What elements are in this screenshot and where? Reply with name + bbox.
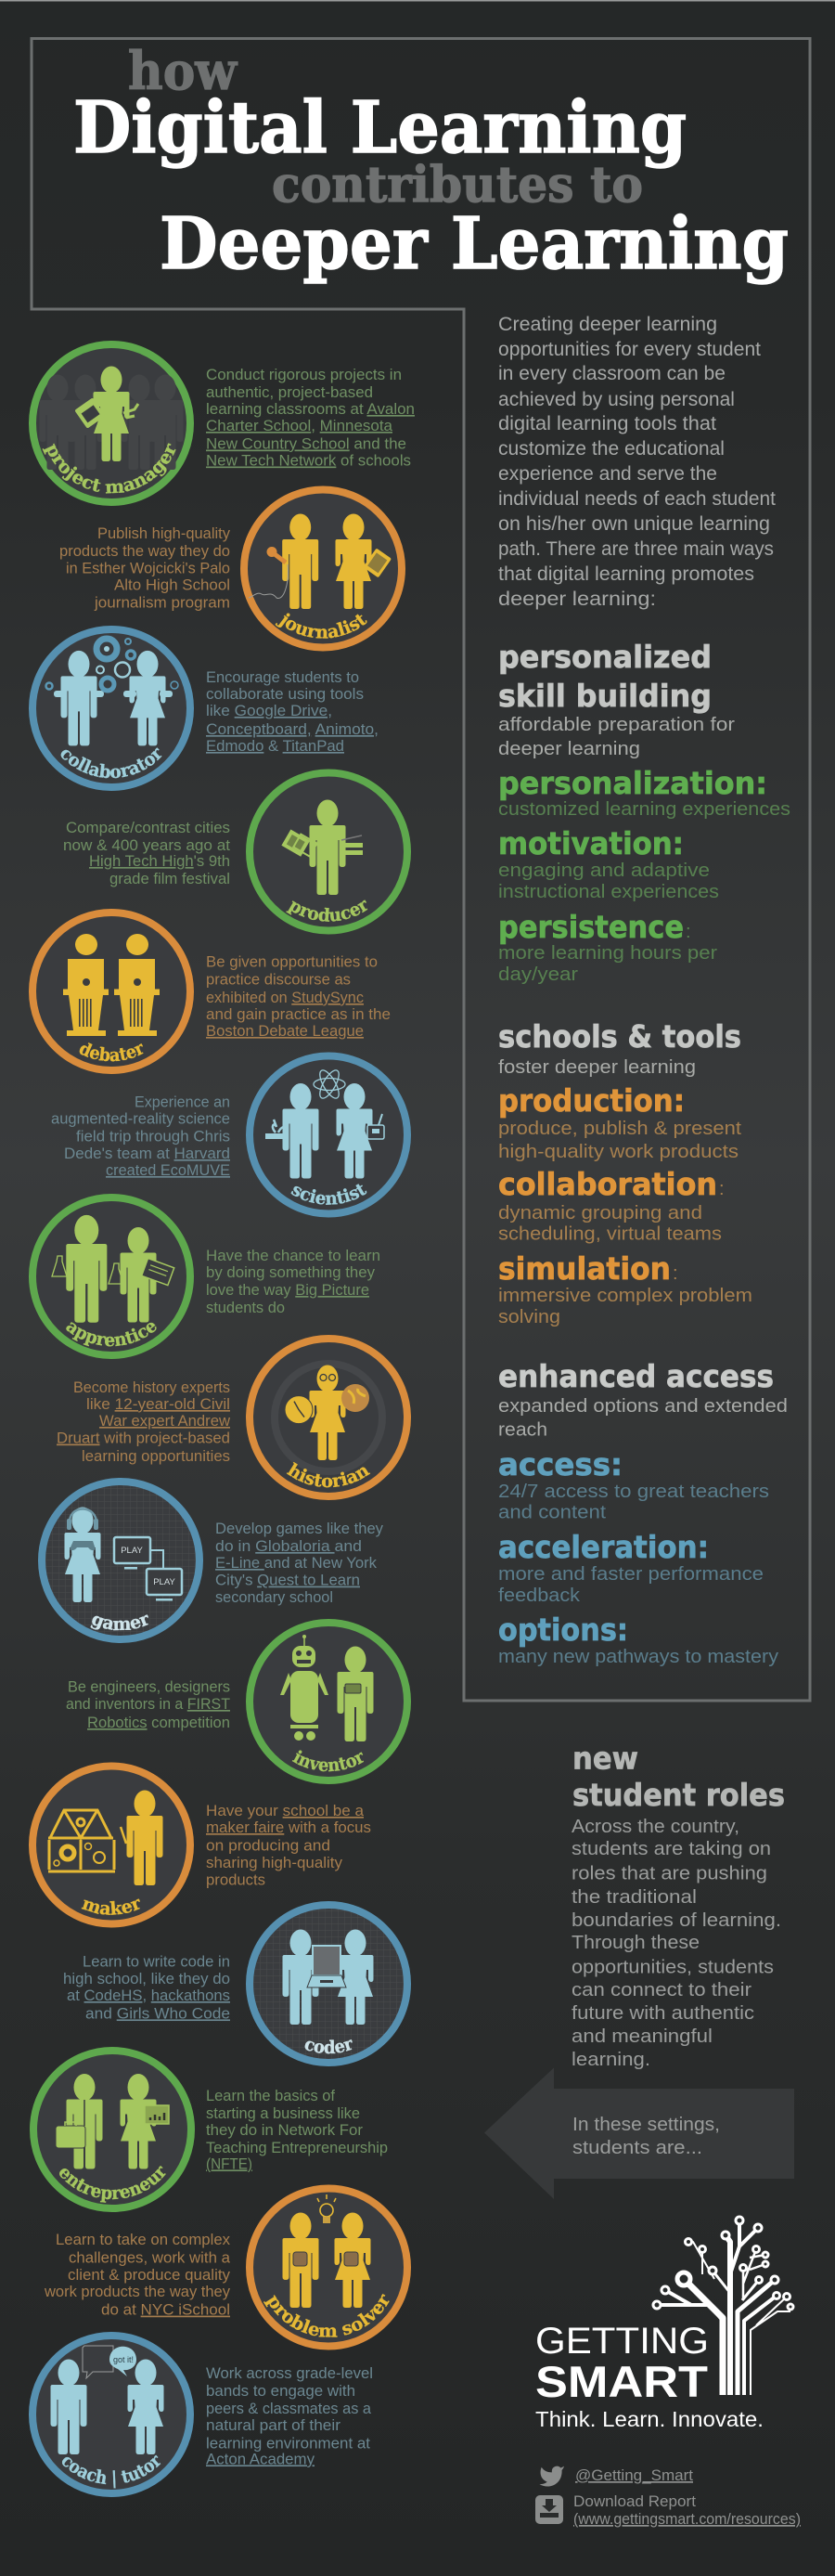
badge: inventor: inventor bbox=[291, 1750, 364, 1771]
text: historian bbox=[57, 1379, 230, 1465]
section: enhanced access: more and faster performance bbox=[498, 1564, 764, 1585]
text: coach tutor bbox=[206, 2365, 373, 2467]
text: historian: War expert Andrew bbox=[99, 1413, 230, 1430]
badge: problem solver: problem solver bbox=[263, 2294, 390, 2337]
logo: getting smart bbox=[535, 2217, 793, 2431]
new student roles text: Across the country, bbox=[572, 1817, 739, 1837]
title: Deeper Learning bbox=[160, 202, 789, 286]
text: historian: like 12-year-old Civil bbox=[86, 1396, 230, 1413]
badge: debater bbox=[29, 909, 194, 1074]
text: entrepreneur: (NFTE) bbox=[206, 2155, 252, 2172]
badge: gamer: PLAY bbox=[121, 1546, 143, 1556]
title: Digital Learning bbox=[73, 86, 687, 170]
text: problem solver bbox=[44, 2232, 231, 2319]
intro paragraph: deeper learning: bbox=[498, 589, 656, 610]
section: enhanced access: options: bbox=[498, 1612, 628, 1648]
intro paragraph: path. There are three main ways bbox=[498, 538, 774, 560]
text: apprentice: students do bbox=[206, 1300, 285, 1316]
badge: coach tutor bbox=[29, 2332, 194, 2497]
intro paragraph: in every classroom can be bbox=[498, 363, 726, 384]
text: collaborator: Conceptboard, Animoto, bbox=[206, 721, 379, 738]
text: maker: products bbox=[206, 1872, 265, 1889]
section: personalized skill building: engaging and adaptive bbox=[498, 861, 710, 881]
section: schools and tools: simulation bbox=[498, 1250, 671, 1287]
text: coder: high school, like they do bbox=[63, 1971, 230, 1987]
badge: coach tutor: coach | tutor bbox=[61, 2454, 161, 2488]
text: scientist: created EcoMUVE bbox=[106, 1162, 230, 1179]
title: contributes to bbox=[272, 156, 643, 214]
section: personalized skill building: personalized bbox=[498, 639, 712, 675]
badge: producer bbox=[246, 769, 411, 934]
text: producer: now & 400 years ago at bbox=[63, 837, 230, 854]
badge: scientist: scientist bbox=[291, 1184, 367, 1205]
badge: coder bbox=[246, 1901, 411, 2066]
section: schools and tools: foster deeper learning bbox=[498, 1057, 696, 1078]
text: problem solver: Learn to take on complex bbox=[56, 2232, 231, 2248]
badge: apprentice: apprentice bbox=[66, 1322, 157, 1346]
text: problem solver: do at NYC iSchool bbox=[101, 2302, 230, 2319]
text: entrepreneur: Learn the basics of bbox=[206, 2088, 335, 2104]
section: schools and tools: : bbox=[673, 1263, 678, 1284]
section: personalized skill building: motivation: bbox=[498, 825, 684, 861]
intro paragraph: customize the educational bbox=[498, 438, 725, 460]
title bbox=[73, 41, 789, 286]
badge: journalist: journalist bbox=[275, 613, 367, 639]
text: coder: and Girls Who Code bbox=[85, 2005, 230, 2022]
text: gamer: secondary school bbox=[215, 1589, 333, 1606]
text: debater: practice discourse as bbox=[206, 971, 351, 988]
download report link: Download Report bbox=[573, 2492, 696, 2510]
badge: entrepreneur: entrepreneur bbox=[59, 2166, 166, 2203]
icon: twitter bbox=[539, 2466, 564, 2487]
text: gamer bbox=[215, 1521, 384, 1606]
text: project manager: New Tech Network of schools bbox=[206, 453, 411, 470]
badge: coach tutor: got it! bbox=[113, 2355, 134, 2364]
new student roles text: opportunities, students bbox=[572, 1957, 774, 1977]
intro paragraph: that digital learning promotes bbox=[498, 563, 754, 585]
section: enhanced access: many new pathways to mastery bbox=[498, 1647, 778, 1667]
section: personalized skill building: : bbox=[686, 922, 691, 942]
section: schools and tools: : bbox=[719, 1179, 725, 1199]
text: coach tutor: Work across grade-level bbox=[206, 2365, 373, 2382]
text: scientist: Experience an bbox=[135, 1094, 230, 1111]
new student roles text: student roles bbox=[572, 1777, 785, 1813]
text: inventor: and inventors in a FIRST bbox=[66, 1696, 230, 1713]
section: enhanced access: 24/7 access to great teachers bbox=[498, 1482, 769, 1502]
text: gamer: E-Line and at New York bbox=[215, 1555, 378, 1572]
intro paragraph: experience and serve the bbox=[498, 463, 717, 485]
text: coach tutor: learning environment at bbox=[206, 2435, 370, 2452]
text: journalist: journalism program bbox=[94, 595, 230, 612]
section: schools and tools: high-quality work products bbox=[498, 1142, 739, 1162]
text: scientist: field trip through Chris bbox=[76, 1129, 230, 1146]
download report link: (www.gettingsmart.com/resources) bbox=[573, 2510, 801, 2528]
text: gamer: do in Globaloria and bbox=[215, 1538, 362, 1555]
text: problem solver: client & produce quality bbox=[68, 2267, 231, 2284]
section: personalized skill building: more learning hours per bbox=[498, 943, 717, 964]
text: coach tutor: peers & classmates as a bbox=[206, 2401, 372, 2417]
text: entrepreneur: they do in Network For bbox=[206, 2122, 364, 2139]
text: producer bbox=[63, 820, 230, 887]
arrow callout: students are... bbox=[572, 2138, 702, 2158]
section: personalized skill building: customized learning experiences bbox=[498, 799, 790, 820]
text: producer: Compare/contrast cities bbox=[66, 820, 230, 836]
section: schools and tools: production: bbox=[498, 1082, 685, 1119]
new student roles text: learning. bbox=[572, 2050, 650, 2070]
text: coach tutor: bands to engage with bbox=[206, 2383, 355, 2400]
twitter handle: @Getting_Smart bbox=[575, 2466, 693, 2484]
section: personalized skill building: affordable preparation for bbox=[498, 715, 735, 735]
badge: gamer: gamer bbox=[91, 1614, 148, 1630]
text: collaborator: Edmodo & TitanPad bbox=[206, 738, 344, 755]
section: schools and tools bbox=[498, 1018, 752, 1327]
text: coach tutor: natural part of their bbox=[206, 2417, 341, 2434]
intro paragraph: achieved by using personal bbox=[498, 389, 735, 410]
text: debater: and gain practice as in the bbox=[206, 1006, 391, 1023]
new student roles text: can connect to their bbox=[572, 1980, 752, 2000]
text: maker: maker faire with a focus bbox=[206, 1819, 371, 1836]
badge: gamer bbox=[38, 1478, 203, 1643]
badge: maker: maker bbox=[82, 1898, 140, 1915]
text: inventor: Robotics competition bbox=[87, 1715, 230, 1731]
section: personalized skill building: deeper learning bbox=[498, 739, 640, 759]
text: historian: Druart with project-based bbox=[57, 1430, 230, 1446]
text: journalist: products the way they do bbox=[59, 543, 230, 560]
new student roles text: roles that are pushing bbox=[572, 1864, 767, 1884]
text: debater bbox=[206, 953, 391, 1040]
section: personalized skill building: day/year bbox=[498, 964, 578, 985]
logo: getting smart: GETTING bbox=[535, 2321, 709, 2362]
text: coder: at CodeHS, hackathons bbox=[67, 1987, 230, 2004]
section: enhanced access: acceleration: bbox=[498, 1529, 709, 1565]
badge: collaborator bbox=[29, 626, 194, 791]
section: schools and tools: dynamic grouping and bbox=[498, 1203, 702, 1223]
intro paragraph: opportunities for every student bbox=[498, 339, 761, 360]
text: problem solver: work products the way they bbox=[44, 2284, 231, 2300]
badge: historian: historian bbox=[286, 1461, 371, 1487]
section: personalized skill building: instructional experiences bbox=[498, 882, 719, 902]
section: personalized skill building: skill building bbox=[498, 678, 712, 714]
section: schools and tools: solving bbox=[498, 1307, 560, 1327]
text: journalist: Alto High School bbox=[114, 577, 230, 594]
text: debater: Boston Debate League bbox=[206, 1023, 364, 1040]
new student roles text: and meaningful bbox=[572, 2026, 713, 2047]
section: schools and tools: schools & tools bbox=[498, 1018, 741, 1055]
text: historian: Become history experts bbox=[73, 1379, 230, 1396]
badge: scientist bbox=[246, 1053, 411, 1218]
text: collaborator: like Google Drive, bbox=[206, 703, 332, 719]
section: enhanced access: reach bbox=[498, 1420, 547, 1441]
intro paragraph: digital learning tools that bbox=[498, 413, 716, 434]
header and panel frame bbox=[32, 39, 810, 1701]
text: project manager: Conduct rigorous projects in bbox=[206, 367, 402, 383]
text: collaborator: collaborate using tools bbox=[206, 686, 364, 703]
text: coder: Learn to write code in bbox=[83, 1954, 230, 1971]
text: apprentice: love the way Big Picture bbox=[206, 1282, 369, 1299]
text: producer: grade film festival bbox=[109, 871, 230, 887]
text: project manager bbox=[206, 367, 415, 470]
text: scientist: augmented-reality science bbox=[51, 1111, 230, 1128]
badge: journalist bbox=[240, 486, 405, 652]
text: inventor: Be engineers, designers bbox=[68, 1678, 230, 1695]
text: debater: exhibited on StudySync bbox=[206, 990, 364, 1006]
section: enhanced access: expanded options and extended bbox=[498, 1396, 788, 1417]
text: coach tutor: Acton Academy bbox=[206, 2451, 315, 2467]
badge: gamer: PLAY bbox=[153, 1577, 175, 1587]
section: personalized skill building: personalization: bbox=[498, 765, 767, 801]
new student roles text: boundaries of learning. bbox=[572, 1910, 781, 1931]
text: maker: on producing and bbox=[206, 1838, 330, 1855]
section: schools and tools: scheduling, virtual teams bbox=[498, 1223, 722, 1244]
new student roles text bbox=[572, 1740, 785, 2070]
badge: project manager bbox=[29, 341, 194, 506]
badge: coder: coder bbox=[304, 2039, 353, 2053]
logo: getting smart: SMART bbox=[535, 2357, 708, 2406]
text: journalist: in Esther Wojcicki's Palo bbox=[66, 561, 230, 577]
section: enhanced access: enhanced access bbox=[498, 1358, 774, 1394]
new student roles text: new bbox=[572, 1740, 638, 1777]
text: historian: learning opportunities bbox=[82, 1448, 230, 1465]
text: collaborator: Encourage students to bbox=[206, 669, 359, 686]
intro paragraph: individual needs of each student bbox=[498, 488, 776, 510]
text: gamer: Develop games like they bbox=[215, 1521, 384, 1537]
text: producer: High Tech High's 9th bbox=[89, 853, 230, 870]
download report link bbox=[573, 2492, 801, 2528]
badge: apprentice bbox=[29, 1194, 194, 1359]
badge: inventor bbox=[246, 1619, 411, 1784]
text: entrepreneur: starting a business like bbox=[206, 2105, 360, 2122]
title: how bbox=[128, 41, 238, 102]
arrow callout: In these settings, bbox=[572, 2115, 720, 2135]
section: enhanced access: feedback bbox=[498, 1586, 581, 1606]
text: maker bbox=[206, 1803, 371, 1889]
logo: getting smart: Think. Learn. Innovate. bbox=[535, 2407, 764, 2431]
section: personalized skill building bbox=[498, 639, 790, 985]
text: project manager: New Country School and the bbox=[206, 436, 406, 453]
icon: circuit tree bbox=[653, 2217, 793, 2395]
text: entrepreneur: Teaching Entrepreneurship bbox=[206, 2140, 388, 2156]
text: inventor bbox=[66, 1678, 230, 1731]
intro paragraph: on his/her own unique learning bbox=[498, 513, 770, 535]
text: scientist: Dede's team at Harvard bbox=[64, 1146, 230, 1162]
text: project manager: learning classrooms at Avalon bbox=[206, 401, 415, 418]
text: journalist: Publish high-quality bbox=[97, 525, 231, 542]
text: project manager: authentic, project-based bbox=[206, 384, 373, 401]
icon: download bbox=[535, 2495, 563, 2524]
text: apprentice: Have the chance to learn bbox=[206, 1248, 380, 1264]
text: maker: Have your school be a bbox=[206, 1803, 365, 1819]
section: personalized skill building: persistence bbox=[498, 909, 684, 945]
intro paragraph bbox=[498, 314, 776, 610]
text: project manager: Charter School, Minnesota bbox=[206, 418, 393, 434]
badge: maker bbox=[29, 1762, 194, 1927]
text: apprentice bbox=[206, 1248, 380, 1316]
text: coder bbox=[63, 1954, 230, 2022]
new student roles text: future with authentic bbox=[572, 2003, 754, 2024]
text: debater: Be given opportunities to bbox=[206, 953, 378, 970]
text: problem solver: challenges, work with a bbox=[69, 2250, 231, 2267]
new student roles text: Through these bbox=[572, 1933, 700, 1953]
badge: historian bbox=[246, 1335, 411, 1500]
new student roles text: students are taking on bbox=[572, 1839, 771, 1859]
new student roles text: the traditional bbox=[572, 1887, 697, 1908]
text: maker: sharing high-quality bbox=[206, 1855, 343, 1871]
badge: problem solver bbox=[246, 2185, 411, 2350]
text: entrepreneur bbox=[206, 2088, 388, 2172]
section: schools and tools: collaboration bbox=[498, 1166, 717, 1202]
text: scientist bbox=[51, 1094, 230, 1179]
arrow callout bbox=[484, 2068, 794, 2199]
badge: producer: producer bbox=[286, 900, 367, 922]
badge: collaborator: collaborator bbox=[61, 747, 161, 778]
section: enhanced access: and content bbox=[498, 1502, 606, 1522]
section: schools and tools: produce, publish & present bbox=[498, 1119, 741, 1139]
text: journalist bbox=[59, 525, 231, 612]
badge: debater: debater bbox=[80, 1042, 143, 1062]
text: gamer: City's Quest to Learn bbox=[215, 1573, 360, 1589]
text: collaborator bbox=[206, 669, 379, 755]
text: apprentice: by doing something they bbox=[206, 1264, 376, 1281]
section: enhanced access: access: bbox=[498, 1446, 623, 1482]
badge: entrepreneur bbox=[30, 2047, 195, 2212]
badge: project manager: project manager bbox=[43, 443, 176, 494]
section: enhanced access bbox=[498, 1358, 788, 1667]
section: schools and tools: immersive complex problem bbox=[498, 1286, 752, 1306]
intro paragraph: Creating deeper learning bbox=[498, 314, 717, 335]
